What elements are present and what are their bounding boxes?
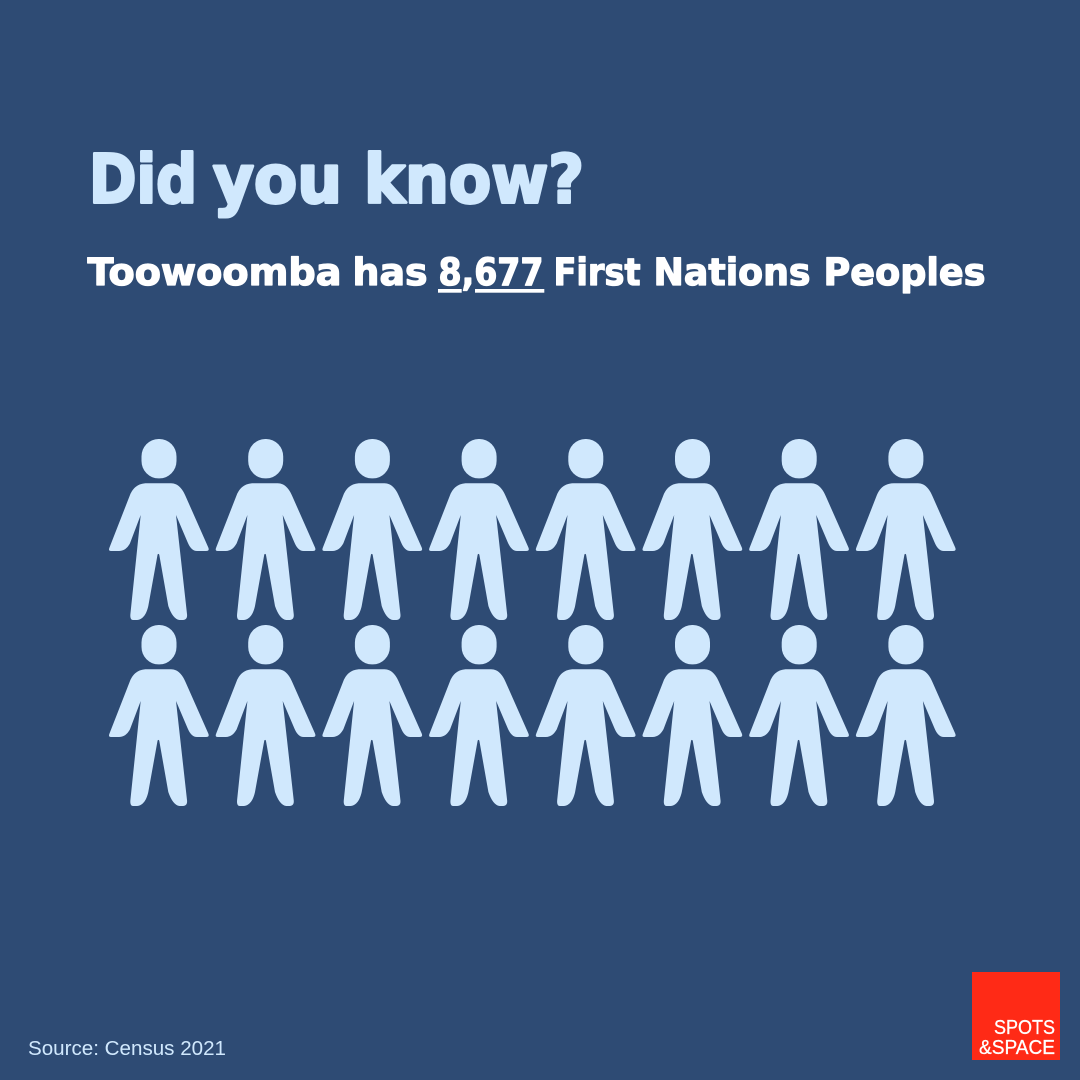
source note: Source: Census 2021 (28, 1038, 226, 1060)
pictogram: 16 people in two rows (109, 439, 956, 806)
row 2 of people (109, 625, 956, 806)
row 1 of people (109, 439, 956, 620)
logo: Spots & Space: &SPACE (979, 1037, 1055, 1059)
title (89, 140, 584, 218)
title: you (213, 140, 342, 218)
subtitle: Nations (654, 250, 810, 294)
subtitle: has (352, 250, 428, 294)
subtitle: Toowoomba (88, 250, 342, 294)
subtitle: Peoples (824, 250, 986, 294)
logo: Spots & Space (972, 972, 1060, 1060)
title: Did (89, 140, 197, 218)
subtitle: First (554, 250, 641, 294)
logo: Spots & Space: SPOTS (994, 1017, 1055, 1039)
title: know? (364, 140, 584, 218)
subtitle (88, 250, 986, 294)
subtitle: 8,677 (438, 250, 544, 294)
